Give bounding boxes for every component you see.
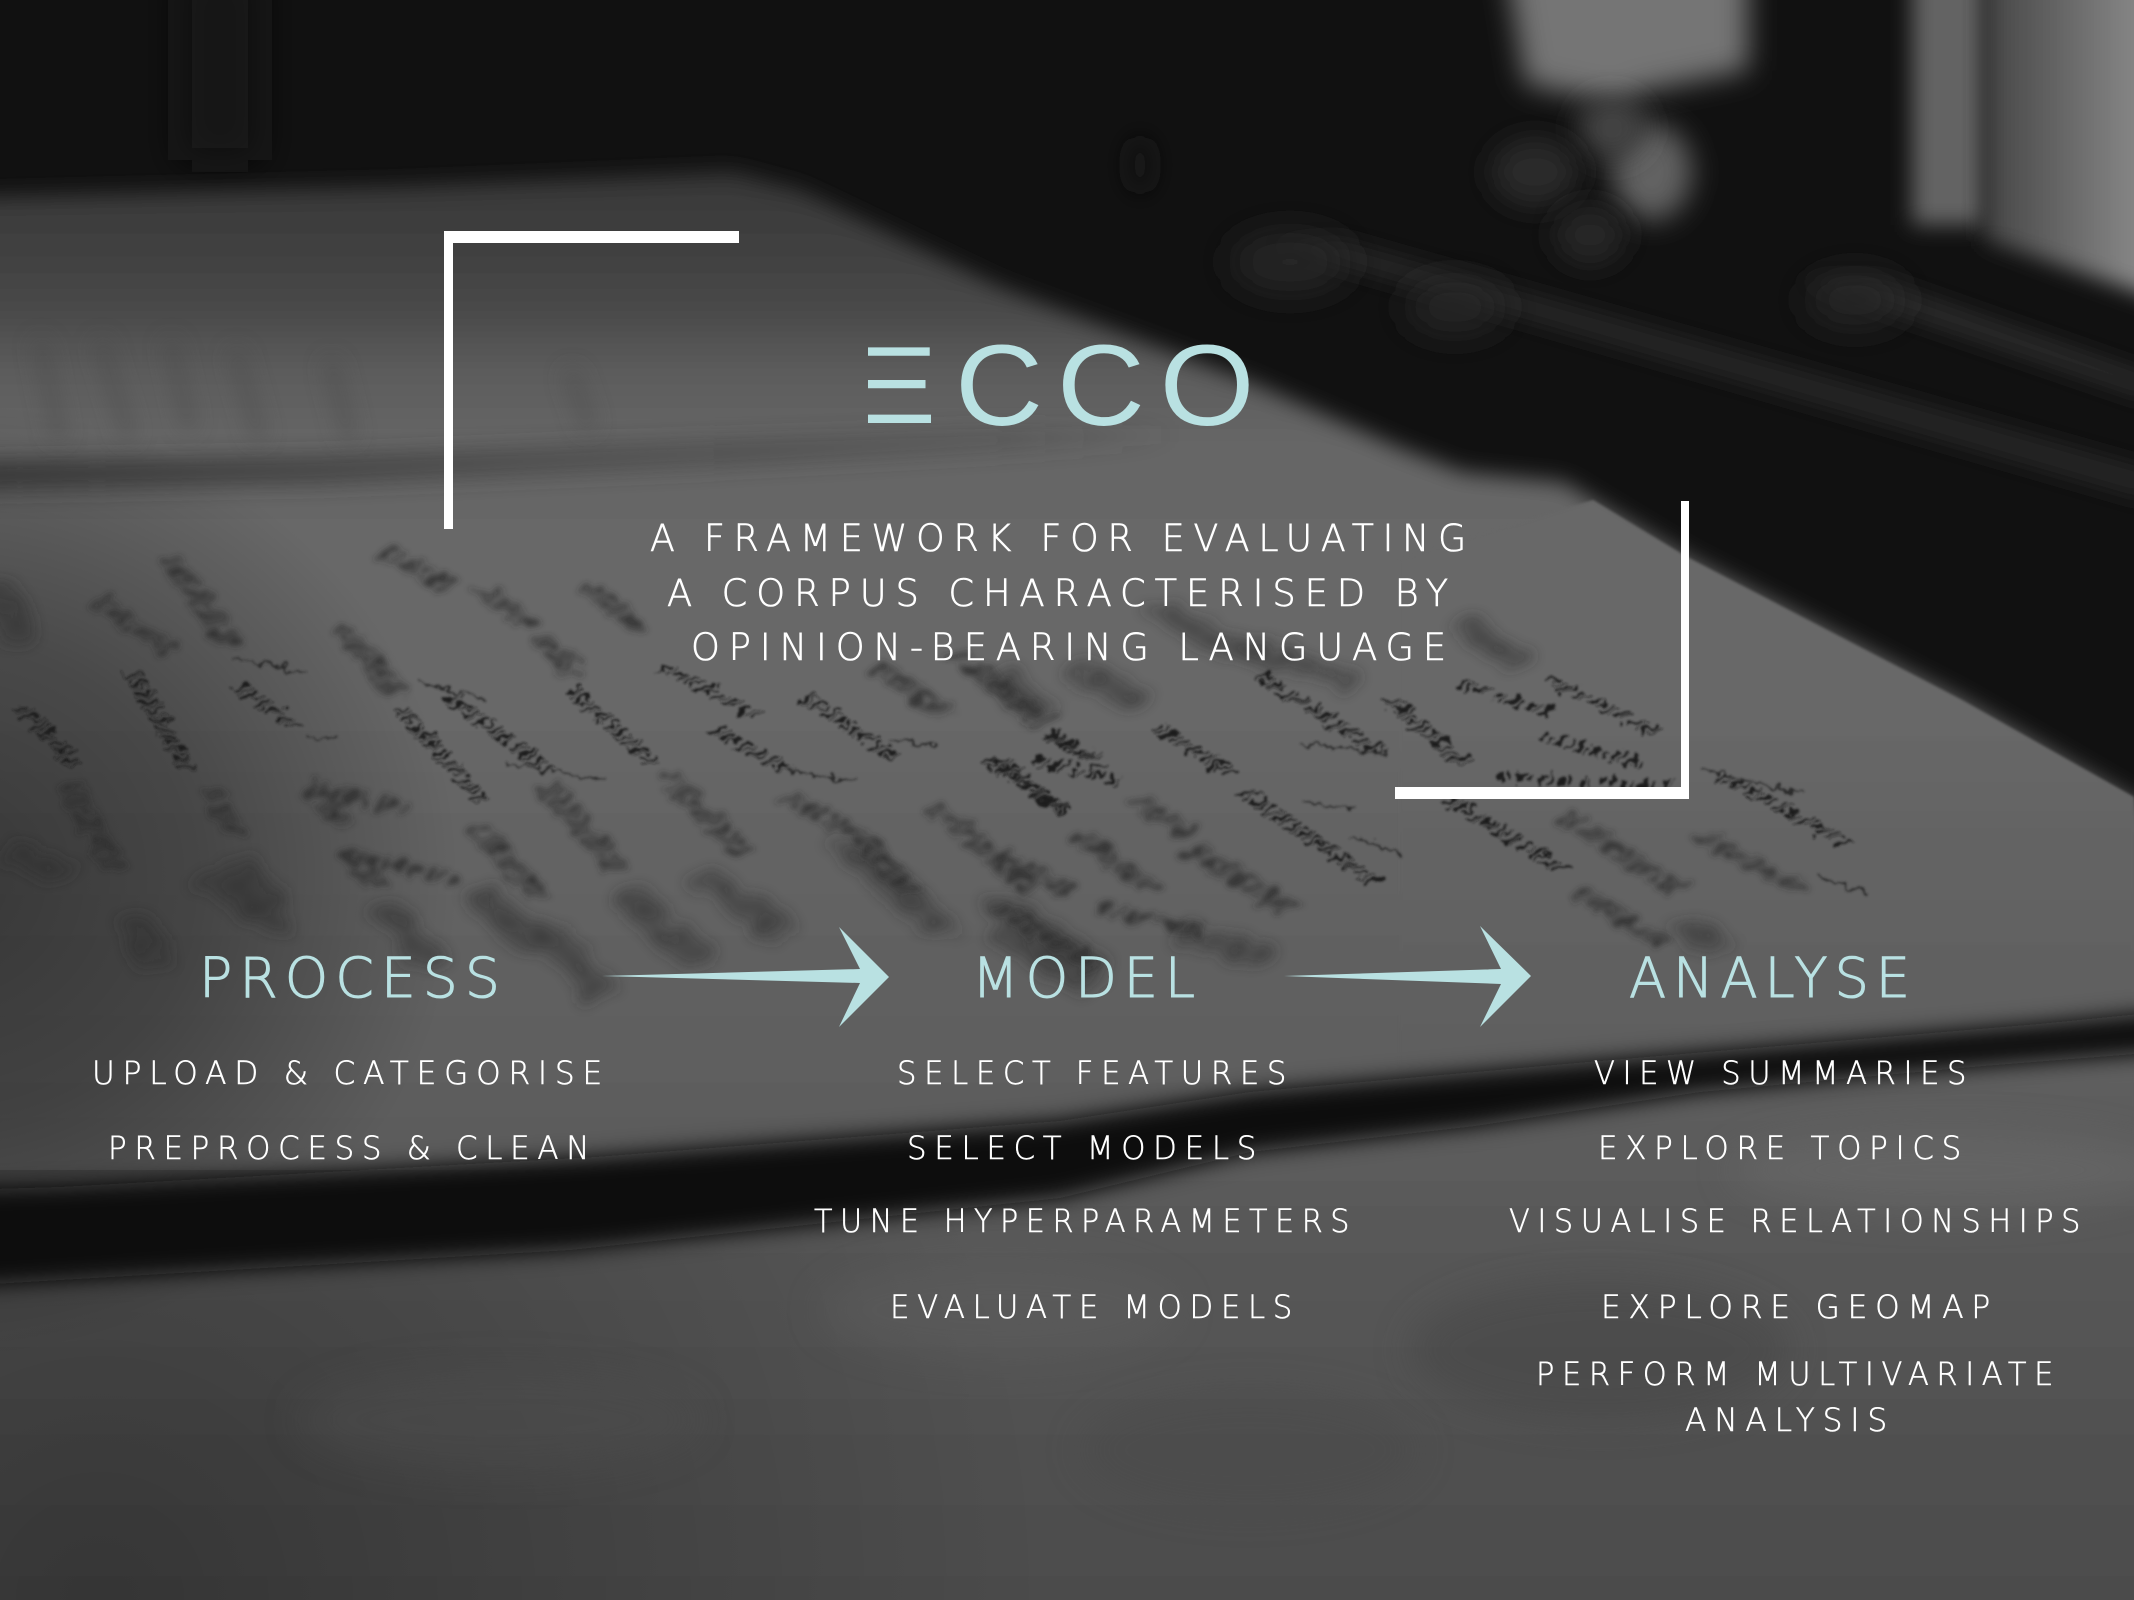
step: perform multivariate analysis: ANALYSIS bbox=[1685, 1401, 1895, 1439]
step: perform multivariate analysis bbox=[1536, 1355, 2061, 1439]
column: model bbox=[814, 946, 1357, 1326]
background: faint blurred writing, upper page bbox=[40, 340, 590, 440]
arrow: model to analyse bbox=[1284, 926, 1531, 1027]
step: select models: SELECT MODELS bbox=[907, 1129, 1264, 1167]
background: handwriting, out of focus bbox=[0, 587, 1723, 1000]
background: blurred objects at top right bbox=[180, 0, 2134, 500]
step: upload and categorise: UPLOAD & CATEGORISE bbox=[92, 1054, 610, 1092]
step: explore topics: EXPLORE TOPICS bbox=[1598, 1129, 1969, 1167]
heading: analyse: ANALYSE bbox=[1629, 946, 1917, 1010]
column: process bbox=[92, 946, 610, 1167]
subtitle bbox=[650, 517, 1475, 669]
heading: process: PROCESS bbox=[199, 946, 507, 1010]
title: ECCO: E bbox=[843, 324, 939, 447]
background: dark shadow band between pages bbox=[0, 1012, 2134, 1286]
subtitle: OPINION-BEARING LANGUAGE bbox=[691, 626, 1455, 669]
column: analyse bbox=[1509, 946, 2088, 1439]
step: preprocess and clean: PREPROCESS & CLEAN bbox=[108, 1129, 597, 1167]
background: handwriting, soft focus bbox=[70, 550, 1803, 967]
corner bracket: bottom right bbox=[1395, 501, 1689, 799]
step: tune hyperparameters: TUNE HYPERPARAMETERS bbox=[814, 1202, 1357, 1240]
step: evaluate models: EVALUATE MODELS bbox=[890, 1288, 1300, 1326]
heading: model: MODEL bbox=[972, 946, 1202, 1010]
arrow: process to model bbox=[602, 927, 889, 1027]
background: handwriting, in focus bbox=[21, 657, 1868, 893]
step: visualise relationships: VISUALISE RELATIONSHIPS bbox=[1509, 1202, 2088, 1240]
step: explore geomap: EXPLORE GEOMAP bbox=[1601, 1288, 1998, 1326]
background: page edge near focus bbox=[1400, 500, 2134, 1150]
step: view summaries: VIEW SUMMARIES bbox=[1594, 1054, 1974, 1092]
title: ECCO bbox=[868, 344, 1249, 426]
step: select features: SELECT FEATURES bbox=[897, 1054, 1294, 1092]
subtitle: A FRAMEWORK FOR EVALUATING bbox=[650, 517, 1475, 560]
background: page shading bbox=[0, 400, 2134, 1600]
corner bracket: top left bbox=[444, 231, 739, 529]
step: perform multivariate analysis: PERFORM MULTIVARIATE bbox=[1536, 1355, 2061, 1393]
background: page fold bbox=[0, 424, 1180, 490]
subtitle: A CORPUS CHARACTERISED BY bbox=[667, 572, 1457, 615]
title: ECCO: CCO bbox=[955, 322, 1254, 450]
